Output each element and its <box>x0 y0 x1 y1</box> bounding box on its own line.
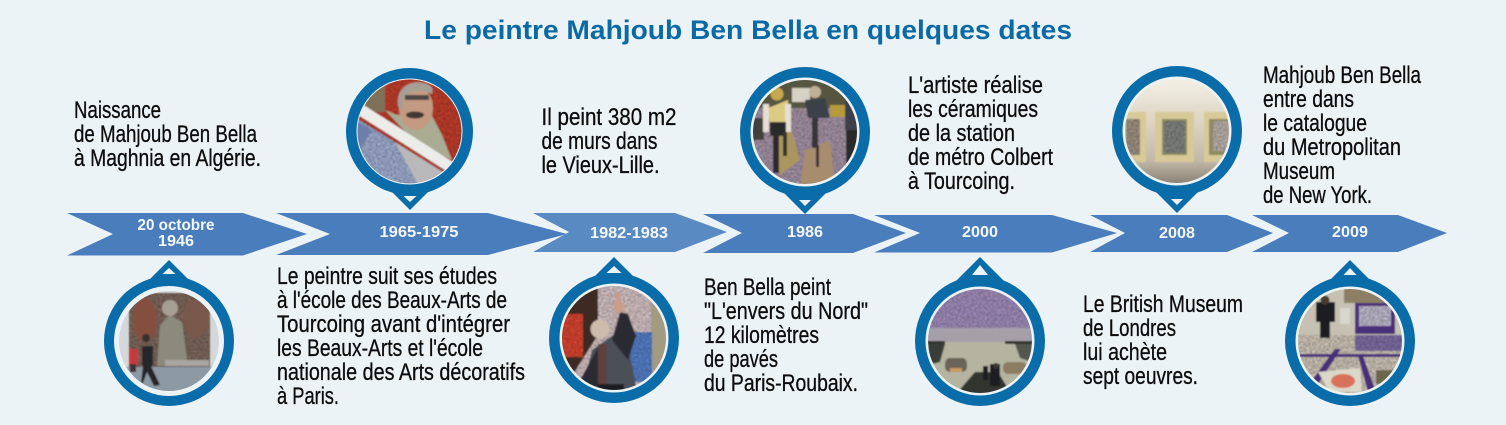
timeline arrow: 1982-1983: 1982-1983 <box>590 225 668 242</box>
text: Metropolitan Museum: Mahjoub Ben Bella <box>1263 62 1421 89</box>
text: L'envers du Nord: Ben Bella peint <box>704 274 831 301</box>
timeline arrow: 2008: 2008 <box>1159 225 1195 242</box>
text: L'envers du Nord: du Paris-Roubaix. <box>704 370 858 397</box>
text: Metropolitan Museum <box>1263 62 1421 209</box>
text: studies: nationale des Arts décoratifs <box>277 359 525 386</box>
text: British Museum: de Londres <box>1083 315 1176 342</box>
text: studies: Tourcoing avant d'intégrer <box>277 311 510 338</box>
text: Colbert station: de la station <box>908 120 1015 147</box>
timeline arrow: 20 octobre 1946 <box>67 213 307 256</box>
timeline arrow: 2000 <box>874 215 1117 252</box>
text: British Museum <box>1083 291 1243 390</box>
pin: 1986 cyclists photo <box>740 67 870 214</box>
text: Metropolitan Museum: entre dans <box>1263 86 1354 113</box>
text: British Museum: sept oeuvres. <box>1083 363 1198 390</box>
text: Metropolitan Museum: de New York. <box>1263 182 1372 209</box>
text: Colbert station <box>908 72 1053 195</box>
text: Vieux-Lille murals: de murs dans <box>542 128 658 155</box>
text: L'envers du Nord: 12 kilomètres <box>704 322 819 349</box>
text: birth <box>74 97 261 172</box>
text: studies: les Beaux-Arts et l'école <box>277 335 483 362</box>
text: Metropolitan Museum: du Metropolitan <box>1263 134 1401 161</box>
timeline arrow: 2000: 2000 <box>962 224 998 241</box>
timeline arrow: 1986 <box>703 214 906 253</box>
text: British Museum: lui achète <box>1083 339 1167 366</box>
timeline arrow: 20 octobre 1946: 1946 <box>158 233 194 250</box>
timeline arrow: 1986: 1986 <box>787 224 823 241</box>
text: studies: à l'école des Beaux-Arts de <box>277 287 507 314</box>
pin: 2009 exhibition photo <box>1285 260 1415 406</box>
timeline arrow: 2009: 2009 <box>1332 224 1368 241</box>
text: Colbert station: de métro Colbert <box>908 144 1053 171</box>
pin: 1946 painting photo <box>104 260 234 406</box>
pin: 2000 metro ceramics photo <box>915 257 1045 406</box>
text: birth: Naissance <box>74 97 161 124</box>
text: Vieux-Lille murals <box>542 104 676 179</box>
title: Le peintre Mahjoub Ben Bella en quelques dates <box>424 15 1072 45</box>
timeline arrow: 20 octobre 1946: 20 octobre <box>138 217 215 234</box>
text: L'envers du Nord: "L'envers du Nord" <box>704 298 868 325</box>
timeline arrow: 2008 <box>1090 215 1273 252</box>
text: L'envers du Nord <box>704 274 868 397</box>
text: Vieux-Lille murals: Il peint 380 m2 <box>542 104 676 131</box>
text: Colbert station: les céramiques <box>908 96 1038 123</box>
text: birth: à Maghnia en Algérie. <box>74 145 261 172</box>
timeline arrow: 2009 <box>1252 215 1447 252</box>
text: Colbert station: L'artiste réalise <box>908 72 1043 99</box>
text: L'envers du Nord: de pavés <box>704 346 778 373</box>
timeline arrow: 1982-1983 <box>533 213 727 252</box>
text: studies <box>277 263 525 410</box>
text: Vieux-Lille murals: le Vieux-Lille. <box>542 152 660 179</box>
pin: 1982-1983 artist pointing photo <box>549 257 679 403</box>
timeline arrow: 1965-1975: 1965-1975 <box>380 224 459 241</box>
text: Colbert station: à Tourcoing. <box>908 168 1015 195</box>
text: studies: à Paris. <box>277 383 339 410</box>
text: Metropolitan Museum: le catalogue <box>1263 110 1367 137</box>
text: British Museum: Le British Museum <box>1083 291 1243 318</box>
pin: 2008 framed works photo <box>1112 66 1242 213</box>
text: Metropolitan Museum: Museum <box>1263 158 1335 185</box>
timeline arrow: 1965-1975 <box>276 213 567 255</box>
pin: 1965-1975 portrait photo <box>346 68 473 210</box>
text: studies: Le peintre suit ses études <box>277 263 497 290</box>
text: birth: de Mahjoub Ben Bella <box>74 121 257 148</box>
